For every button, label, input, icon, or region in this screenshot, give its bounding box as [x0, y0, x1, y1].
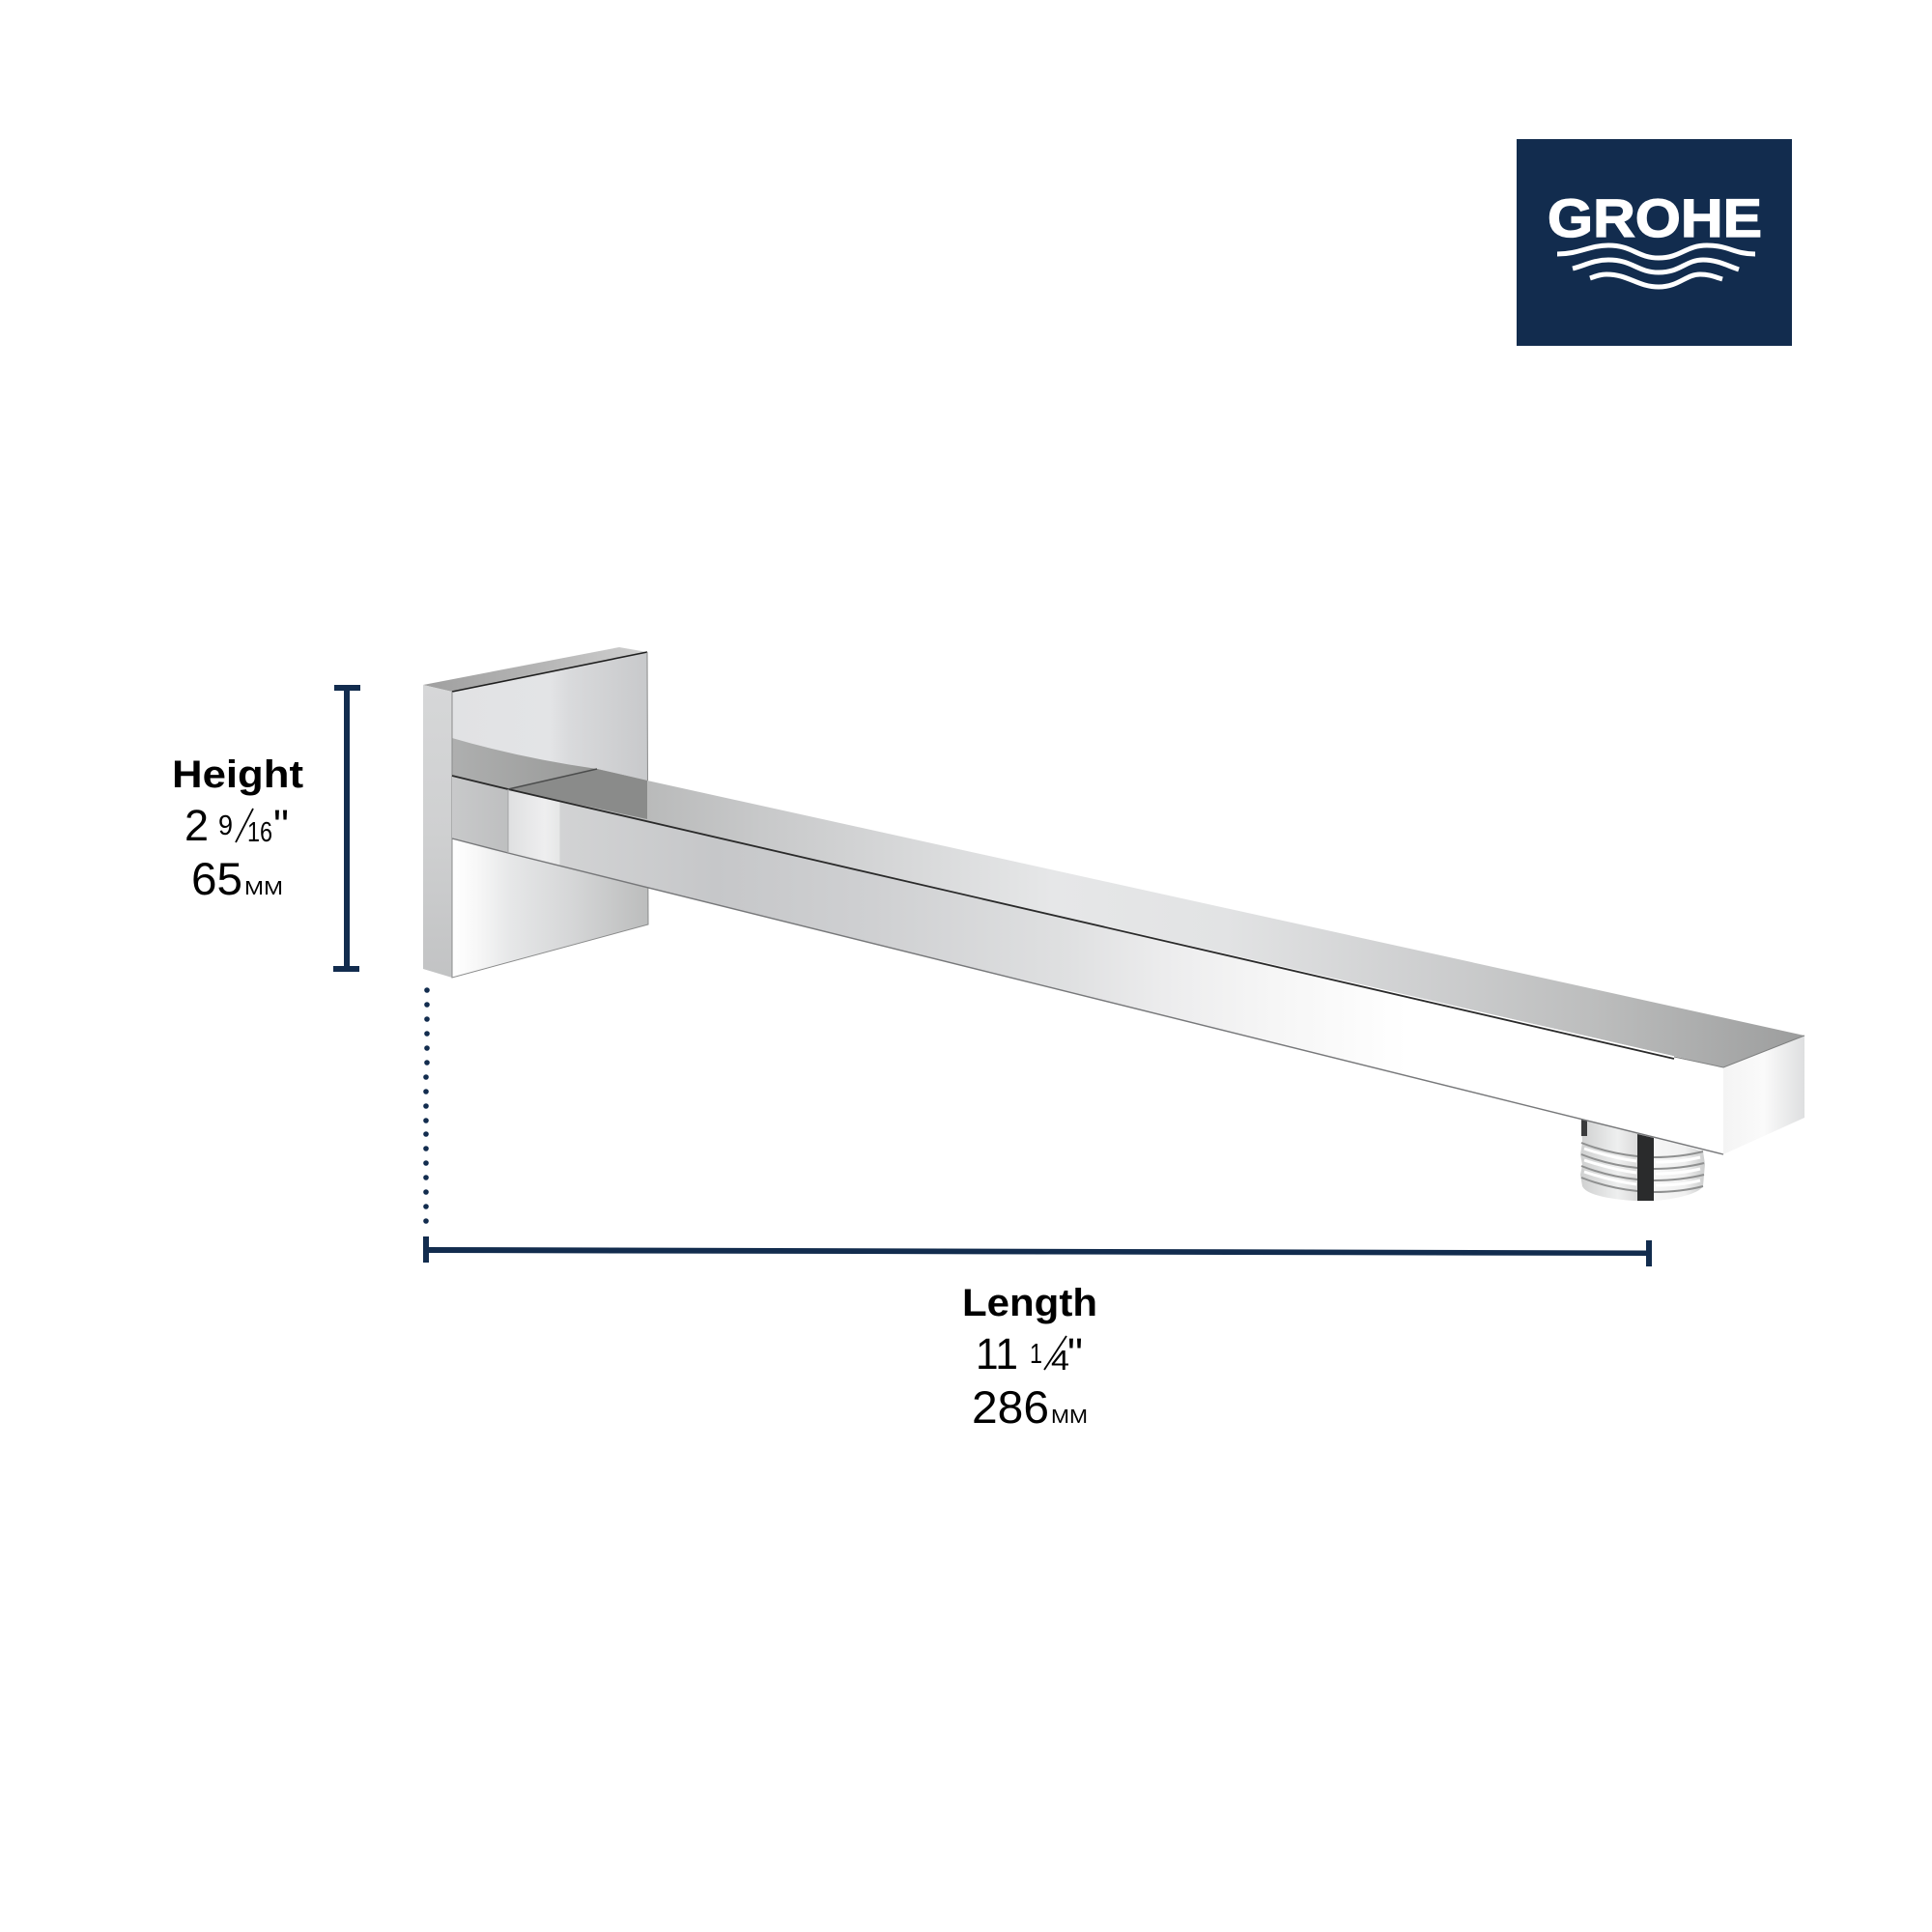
arm front face	[508, 789, 1723, 1154]
logo wordmark: GROHE	[1548, 187, 1762, 248]
threaded connector	[1580, 1119, 1705, 1201]
logo waves	[1557, 245, 1755, 287]
height label: 65	[191, 853, 242, 904]
length label: 286	[972, 1381, 1049, 1433]
height dimension bar	[333, 685, 360, 972]
length label: 11	[976, 1329, 1018, 1378]
length label: 4	[1051, 1346, 1069, 1377]
height label: "	[273, 801, 289, 850]
height label	[172, 753, 303, 904]
height label: MM	[244, 878, 283, 899]
collar	[452, 776, 508, 853]
length label	[962, 1282, 1097, 1433]
shower arm product illustration	[423, 647, 1804, 1201]
length label: MM	[1051, 1406, 1088, 1428]
length dimension bar	[423, 1236, 1652, 1266]
arm top face	[508, 769, 1804, 1067]
length label: Length	[962, 1282, 1097, 1324]
height label: 9	[218, 810, 233, 841]
height label: 16	[247, 817, 272, 848]
length label: 1	[1030, 1339, 1042, 1370]
length label: "	[1067, 1329, 1083, 1378]
arm end face	[1723, 1036, 1804, 1154]
wall plate	[423, 647, 648, 978]
dotted guide line	[423, 987, 430, 1224]
height label: 2	[185, 801, 209, 850]
logo: GROHE	[1517, 139, 1792, 346]
height label: Height	[172, 753, 303, 796]
